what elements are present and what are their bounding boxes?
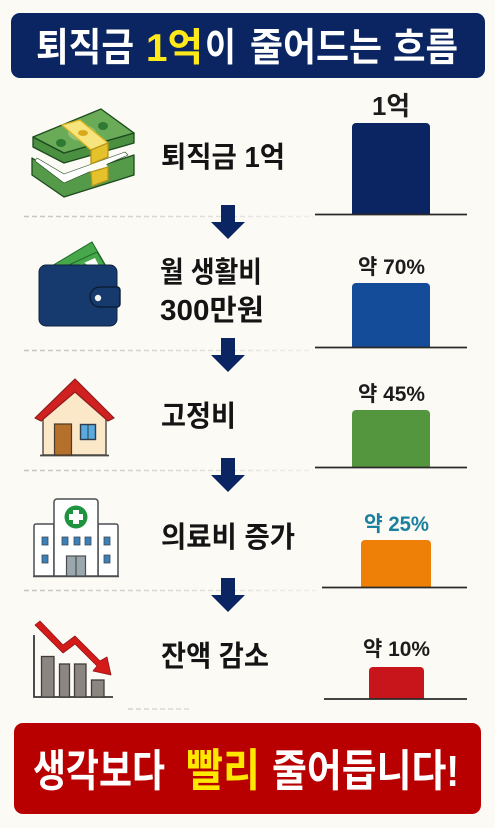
bar: 25% (322, 513, 467, 588)
label: retirement money: 퇴직금 1억 (161, 141, 285, 174)
icon: hospital (33, 499, 119, 576)
icon: wallet (39, 242, 120, 326)
arrow 3 (211, 458, 245, 492)
icon: falling chart (34, 621, 113, 697)
title banner (11, 13, 485, 78)
label: monthly living cost (160, 256, 264, 327)
bottom banner (14, 723, 481, 814)
bottom banner: 줄어듭니다! (272, 747, 459, 796)
arrow 1 (211, 205, 245, 239)
bottom banner: 빨리 (186, 745, 260, 796)
label: monthly living cost: 300만원 (160, 294, 264, 327)
title banner: 흐름 (393, 27, 458, 70)
bar: 25%: 약 25% (364, 513, 429, 536)
label: monthly living cost: 월 생활비 (160, 256, 262, 289)
bar: 45%: 약 45% (358, 383, 425, 406)
bar: 1억: 1억 (372, 91, 410, 121)
title banner: 1억 (146, 27, 203, 70)
title banner: 퇴직금 (36, 27, 134, 70)
dashed dividers (24, 216, 316, 709)
bar: 10%: 약 10% (363, 638, 430, 661)
bottom banner: 생각보다 (33, 747, 165, 796)
title banner: 이 (205, 27, 236, 70)
bar: 70% (315, 256, 467, 348)
arrow 2 (211, 338, 245, 372)
bar: 70%: 약 70% (358, 256, 425, 279)
label: medical cost increase: 의료비 증가 (161, 521, 295, 554)
arrow 4 (211, 578, 245, 612)
bar: 45% (315, 383, 467, 468)
icon: house (35, 379, 114, 456)
label: fixed cost: 고정비 (161, 400, 236, 433)
title banner: 줄어드는 (250, 27, 382, 70)
icon: money stacks (32, 109, 134, 197)
bar: 1억 (315, 91, 467, 214)
label: balance decrease: 잔액 감소 (161, 640, 269, 673)
bar: 10% (324, 638, 467, 699)
